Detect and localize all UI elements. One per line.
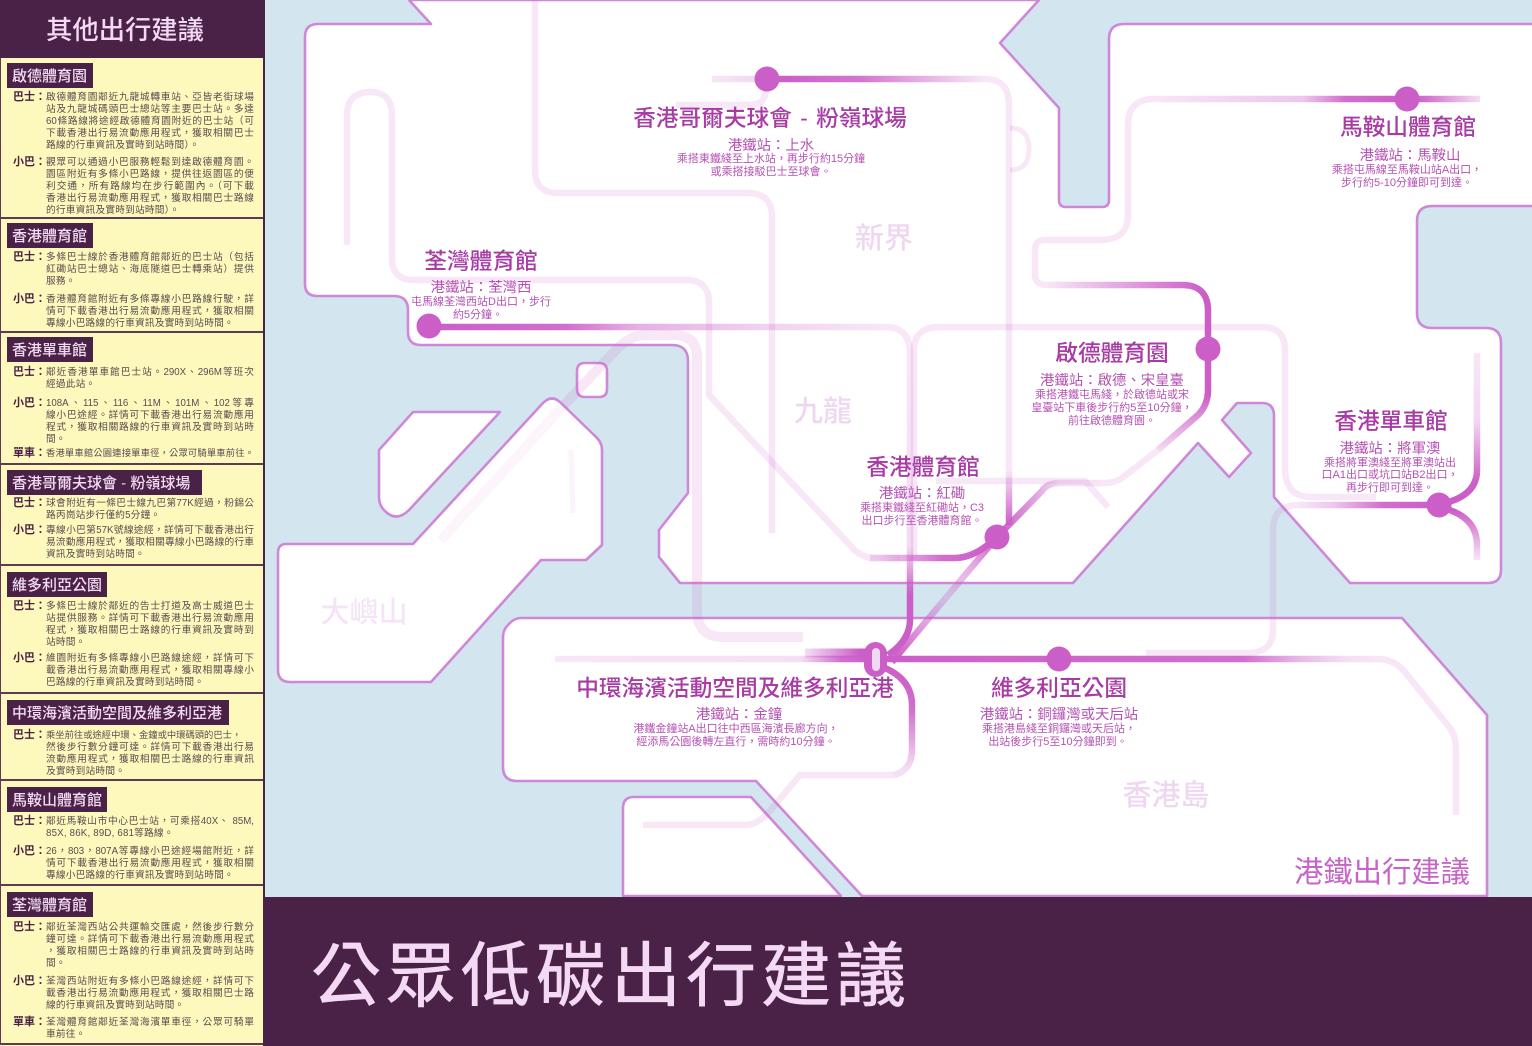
bus text: 巴士： <box>13 366 46 378</box>
section: Tsuen Wan <box>0 886 263 1045</box>
bus text: 及實時到站時間。 <box>46 766 125 777</box>
bus text: 路丙崗站步行僅約5分鐘。 <box>46 510 160 521</box>
label: Ma On Shan Sports Centre: 馬鞍山體育館 <box>1340 114 1476 140</box>
bus text <box>13 90 254 151</box>
cycling text: 香港單車館公園連接單車徑，公眾可騎單車前往。 <box>46 448 254 458</box>
bus text: 巴士： <box>13 729 46 741</box>
section heading: 馬鞍山體育館 <box>12 792 102 809</box>
bus text: 60條路線將途經啟德體育園附近的巴士站（可 <box>46 116 254 127</box>
label: Velodrome: 口A1出口或坑口站B2出口， <box>1322 467 1458 481</box>
region label: New Territories: 新界 <box>855 222 913 255</box>
cycling text: 單車： <box>13 447 46 459</box>
bus text: 鄰近香港單車館巴士站。290X、296M等班次 <box>46 367 254 378</box>
section: Central Harbourfront <box>0 694 263 781</box>
bus text: 程式，獲取相關巴士路線的行車資訊及實時到 <box>46 625 254 636</box>
section heading: 香港哥爾夫球會 - 粉嶺球場 <box>12 475 190 492</box>
bus text: 服務。 <box>46 276 76 287</box>
minibus text: 易流動應用程式，獲取相關專線小巴路線的行車 <box>46 537 254 548</box>
minibus text: 小巴： <box>13 975 46 987</box>
bus text: 流動應用程式，獲取相關巴士路線的行車資訊 <box>46 754 254 765</box>
bus text: 鄰近馬鞍山市中心巴士站，可乘搭40X、 85M, <box>46 816 254 827</box>
minibus text <box>13 974 254 1011</box>
bus text <box>13 920 254 969</box>
section heading <box>7 892 93 917</box>
minibus text: 維園附近有多條專線小巴路線途經，詳情可下 <box>46 653 254 664</box>
section heading: 維多利亞公園 <box>12 577 102 594</box>
label: Kai Tak Sports Park: 皇臺站下車後步行約5至10分鐘， <box>1031 400 1193 414</box>
minibus text <box>13 524 254 560</box>
bus text: 多條巴士線於香港體育館鄰近的巴士站（包括 <box>46 252 254 263</box>
land masses <box>278 0 1532 896</box>
bus text: 巴士： <box>13 251 46 263</box>
bus text: 85X, 86K, 89D, 681等路線。 <box>46 828 174 839</box>
section heading <box>7 337 93 362</box>
minibus text: 載香港出行易流動應用程式，獲取相關巴士路 <box>46 988 254 999</box>
minibus text: 巴路線的行車資訊及實時到站時間。 <box>46 677 204 688</box>
bus text: 巴士： <box>13 497 46 509</box>
label: Golf Club: 乘搭東鐵綫至上水站，再步行約15分鐘 <box>677 151 865 165</box>
label: Velodrome: 再步行即可到達。 <box>1346 481 1434 494</box>
minibus text: 專線小巴路線的行車資訊及實時到站時間。 <box>46 318 234 329</box>
label: Velodrome: 乘搭將軍澳綫至將軍澳站出 <box>1324 455 1456 469</box>
minibus text: 利交通，所有路線均在步行範圍內。（可下載 <box>46 181 254 192</box>
label: Kai Tak Sports Park <box>1031 340 1193 427</box>
minibus text: 的行車資訊及實時到站時間）。 <box>46 205 180 216</box>
bus text: 下載香港出行易流動應用程式，獲取相關巴士 <box>46 128 254 139</box>
bus text: 巴士： <box>13 921 46 933</box>
minibus text: 108A、115、116、11M、101M、102等專 <box>46 398 254 409</box>
label: Ma On Shan Sports Centre: 港鐵站：馬鞍山 <box>1360 147 1460 164</box>
bus text: 乘坐前往或途經中環、金鐘或中環碼頭的巴士， <box>46 730 241 740</box>
label: Ma On Shan Sports Centre <box>1332 114 1482 189</box>
label: Central Harbourfront: 港鐵金鐘站A出口往中西區海濱長廊方向， <box>633 721 839 735</box>
section heading <box>7 470 202 495</box>
minibus text: 香港體育館附近有多條專線小巴路線行駛，詳 <box>46 294 254 305</box>
bus text <box>13 250 254 287</box>
label: Central Harbourfront <box>576 675 894 748</box>
bus text <box>13 814 254 839</box>
label: Golf Club <box>633 105 907 178</box>
bus text: 路線的行車資訊及實時到站時間）。 <box>46 140 199 151</box>
sidebar title: 其他出行建議 <box>46 15 204 45</box>
minibus text: 26，803，807A等專線小巴途經場館附近，詳 <box>46 846 254 857</box>
section heading: 中環海濱活動空間及維多利亞港 <box>12 705 222 722</box>
label: Central Harbourfront: 港鐵站：金鐘 <box>696 706 782 723</box>
section heading: 香港單車館 <box>12 342 87 359</box>
bus text: 間。 <box>46 958 66 969</box>
label: Hong Kong Coliseum <box>860 454 984 527</box>
minibus text <box>13 292 254 329</box>
pale background lines <box>347 0 1456 825</box>
section: Kai Tak Sports Park <box>0 58 263 219</box>
minibus text: 小巴： <box>13 156 46 168</box>
gradient lines <box>712 76 985 82</box>
minibus text: 線的行車資訊及實時到站時間。 <box>46 1000 184 1011</box>
heading: MTR travel advice: 港鐵出行建議 <box>1294 856 1470 889</box>
section: Victoria Park <box>0 566 263 694</box>
label: Victoria Park: 出站後步行5至10分鐘即到。 <box>988 734 1128 748</box>
bus text: 站及九龍城碼頭巴士總站等主要巴士站。多達 <box>46 104 254 115</box>
cycling text: 荃灣體育館鄰近荃灣海濱單車徑，公眾可騎單 <box>46 1017 254 1028</box>
sidebar title <box>0 0 263 58</box>
minibus text: 程式，獲取相關路線的行車資訊及實時到站時 <box>46 422 254 433</box>
minibus text: 小巴： <box>13 397 46 409</box>
bus text: 鐘可達。詳情可下載香港出行易流動應用程式 <box>46 934 254 945</box>
bus text: 紅磡站巴士總站、海底隧道巴士轉乘站）提供 <box>46 264 254 275</box>
cycling text: 車前往。 <box>46 1029 86 1040</box>
label: Tsuen Wan Sports Centre: 約5分鐘。 <box>453 307 503 321</box>
label: Victoria Park <box>980 675 1138 748</box>
metro lines <box>347 0 1480 825</box>
minibus text: 情可下載香港出行易流動應用程式，獲取相關 <box>46 858 254 869</box>
minibus text: 觀眾可以通過小巴服務輕鬆到達啟德體育園。 <box>46 157 254 168</box>
bus text: 啟德體育園鄰近九龍城轉車站、亞皆老街球場 <box>46 92 254 103</box>
minibus text: 資訊及實時到站時間。 <box>46 549 145 560</box>
section heading <box>7 223 93 248</box>
minibus text: 小巴： <box>13 845 46 857</box>
minibus text: 載香港出行易流動應用程式，獲取相關專線小 <box>46 665 254 676</box>
label: Kai Tak Sports Park: 乘搭港鐵屯馬綫，於啟德站或宋 <box>1035 387 1189 401</box>
bus text: 球會附近有一條巴士線九巴第77K經過，粉錦公 <box>46 498 254 509</box>
cycling text <box>13 1016 254 1040</box>
bottom banner <box>265 897 1532 1046</box>
section: Ma On Shan <box>0 781 263 886</box>
label: Kai Tak Sports Park: 前往啟德體育園。 <box>1068 413 1156 427</box>
label: Velodrome: 港鐵站：將軍澳 <box>1340 440 1440 457</box>
bus text <box>13 600 254 648</box>
bus text: 站時間。 <box>46 637 86 648</box>
bus text: 鄰近荃灣西站公共運輸交匯處，然後步行數分 <box>46 922 254 933</box>
minibus text <box>13 844 254 881</box>
sidebar: other travel advice <box>0 0 265 1046</box>
minibus text: 線小巴途經。詳情可下載香港出行易流動應用 <box>46 410 254 421</box>
section heading <box>7 700 229 725</box>
label: Central Harbourfront: 中環海濱活動空間及維多利亞港 <box>576 675 894 701</box>
label: Central Harbourfront: 經添馬公園後轉左直行，需時約10分鐘。 <box>636 734 836 748</box>
minibus text <box>13 652 254 688</box>
bus text: 經過此站。 <box>46 379 95 390</box>
minibus text: 荃灣西站附近有多條小巴路線途經，詳情可下 <box>46 976 254 987</box>
label: Velodrome <box>1322 408 1458 494</box>
label: Golf Club: 或乘搭接駁巴士至球會。 <box>710 164 832 178</box>
label: Kai Tak Sports Park: 港鐵站：啟德、宋皇臺 <box>1040 372 1184 389</box>
label: Hong Kong Coliseum: 乘搭東鐵綫至紅磡站，C3 <box>860 500 984 514</box>
label: Victoria Park: 維多利亞公園 <box>991 675 1127 701</box>
minibus text: 專線小巴路線的行車資訊及實時到站時間。 <box>46 870 234 881</box>
region label: Hong Kong Island: 香港島 <box>1122 779 1210 812</box>
bus text: 巴士： <box>13 600 46 612</box>
label: Velodrome: 香港單車館 <box>1334 408 1448 434</box>
section heading <box>7 787 107 812</box>
minibus text: 情可下載香港出行易流動應用程式，獲取相關 <box>46 306 254 317</box>
bus text <box>13 366 254 390</box>
station dots <box>416 66 1452 677</box>
section heading <box>7 63 93 88</box>
cycling text <box>13 446 254 459</box>
section: Hong Kong Coliseum <box>0 219 263 333</box>
main title: 公眾低碳出行建議 <box>311 937 911 1015</box>
label: Victoria Park: 港鐵站：銅鑼灣或天后站 <box>980 706 1138 723</box>
label: Tsuen Wan Sports Centre: 屯馬線荃灣西站D出口，步行 <box>411 294 551 308</box>
bus text: 然後步行數分鐘可達。詳情可下載香港出行易 <box>46 742 254 753</box>
section heading: 啟德體育園 <box>12 68 87 85</box>
label: Hong Kong Coliseum: 香港體育館 <box>866 454 980 480</box>
minibus text: 香港出行易流動應用程式，獲取相關巴士路線 <box>46 193 254 204</box>
section heading: 荃灣體育館 <box>12 897 87 914</box>
label: Hong Kong Coliseum: 港鐵站：紅磡 <box>879 485 965 502</box>
label: Tsuen Wan Sports Centre: 荃灣體育館 <box>424 248 538 274</box>
bus text: ，獲取相關巴士路線的行車資訊及實時到站時 <box>46 946 254 957</box>
label: Ma On Shan Sports Centre: 乘搭屯馬線至馬鞍山站A出口， <box>1332 162 1482 176</box>
section: Velodrome <box>0 333 263 465</box>
label: Tsuen Wan Sports Centre: 港鐵站：荃灣西 <box>431 279 531 296</box>
minibus text: 園區附近有多條小巴路線，提供往返園區的便 <box>46 169 254 180</box>
label: Golf Club: 港鐵站：上水 <box>728 137 815 154</box>
bus text: 巴士： <box>13 91 46 103</box>
minibus text: 小巴： <box>13 524 46 536</box>
cycling text: 單車： <box>13 1016 46 1028</box>
label: Hong Kong Coliseum: 出口步行至香港體育館。 <box>862 513 982 527</box>
section heading <box>7 572 107 597</box>
section heading: 香港體育館 <box>12 228 87 245</box>
minibus text <box>13 396 254 445</box>
label: Ma On Shan Sports Centre: 步行約5-10分鐘即可到達。 <box>1341 175 1473 189</box>
label: Kai Tak Sports Park: 啟德體育園 <box>1055 340 1169 366</box>
label: Tsuen Wan Sports Centre <box>411 248 551 321</box>
label: Victoria Park: 乘搭港島綫至銅鑼灣或天后站， <box>982 721 1136 735</box>
minibus text: 小巴： <box>13 652 46 664</box>
label: Golf Club: 香港哥爾夫球會 - 粉嶺球場 <box>633 105 907 131</box>
bus text <box>13 728 254 777</box>
region label: Lantau: 大嶼山 <box>320 596 408 629</box>
minibus text <box>13 156 254 216</box>
bus text: 多條巴士線於鄰近的告士打道及高士威道巴士 <box>46 601 254 612</box>
bus text: 站提供服務。詳情可下載香港出行易流動應用 <box>46 613 254 624</box>
bus text: 巴士： <box>13 815 46 827</box>
region label: Kowloon: 九龍 <box>794 395 852 428</box>
minibus text: 專線小巴第57K號線途經，詳情可下載香港出行 <box>46 525 254 536</box>
minibus text: 小巴： <box>13 293 46 305</box>
bus text <box>13 496 254 521</box>
section: Golf Club <box>0 465 263 566</box>
minibus text: 間。 <box>46 434 66 445</box>
